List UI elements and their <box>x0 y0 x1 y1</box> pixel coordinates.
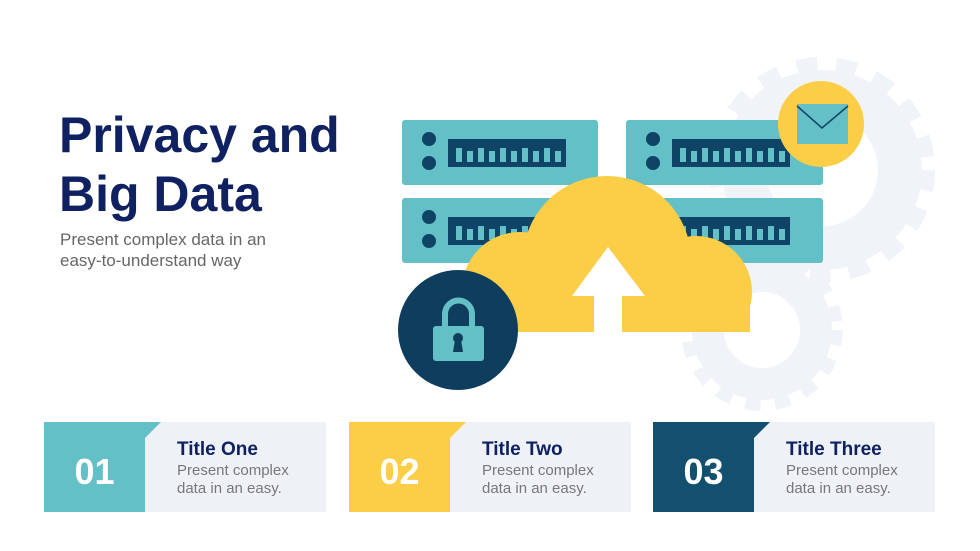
card 2: data in an easy. <box>482 480 587 497</box>
card 3: data in an easy. <box>786 480 891 497</box>
illustration: cloud servers <box>398 57 935 411</box>
subtitle <box>60 230 266 270</box>
card 3 <box>653 422 935 512</box>
card 1: data in an easy. <box>177 480 282 497</box>
card 2 <box>349 422 631 512</box>
subtitle: easy-to-understand way <box>60 251 241 270</box>
servers <box>402 120 823 263</box>
title: Privacy and <box>59 107 340 163</box>
card 1: Title One <box>177 439 258 460</box>
subtitle: Present complex data in an <box>60 230 266 249</box>
card 1: 01 <box>74 451 115 492</box>
icon: gears background <box>689 68 924 403</box>
arrow up <box>572 247 645 332</box>
card 2: Title Two <box>482 439 563 460</box>
icon: cloud upload <box>466 176 752 332</box>
card 2: 02 <box>379 451 420 492</box>
card 2: Present complex <box>482 462 594 479</box>
card 3: Title Three <box>786 439 882 460</box>
card 3: Present complex <box>786 462 898 479</box>
icon: mail <box>778 81 864 167</box>
icon: lock <box>398 270 518 390</box>
title <box>59 107 340 222</box>
card 1: Present complex <box>177 462 289 479</box>
card 1 <box>44 422 326 512</box>
card 3: 03 <box>683 451 724 492</box>
title: Big Data <box>59 166 262 222</box>
